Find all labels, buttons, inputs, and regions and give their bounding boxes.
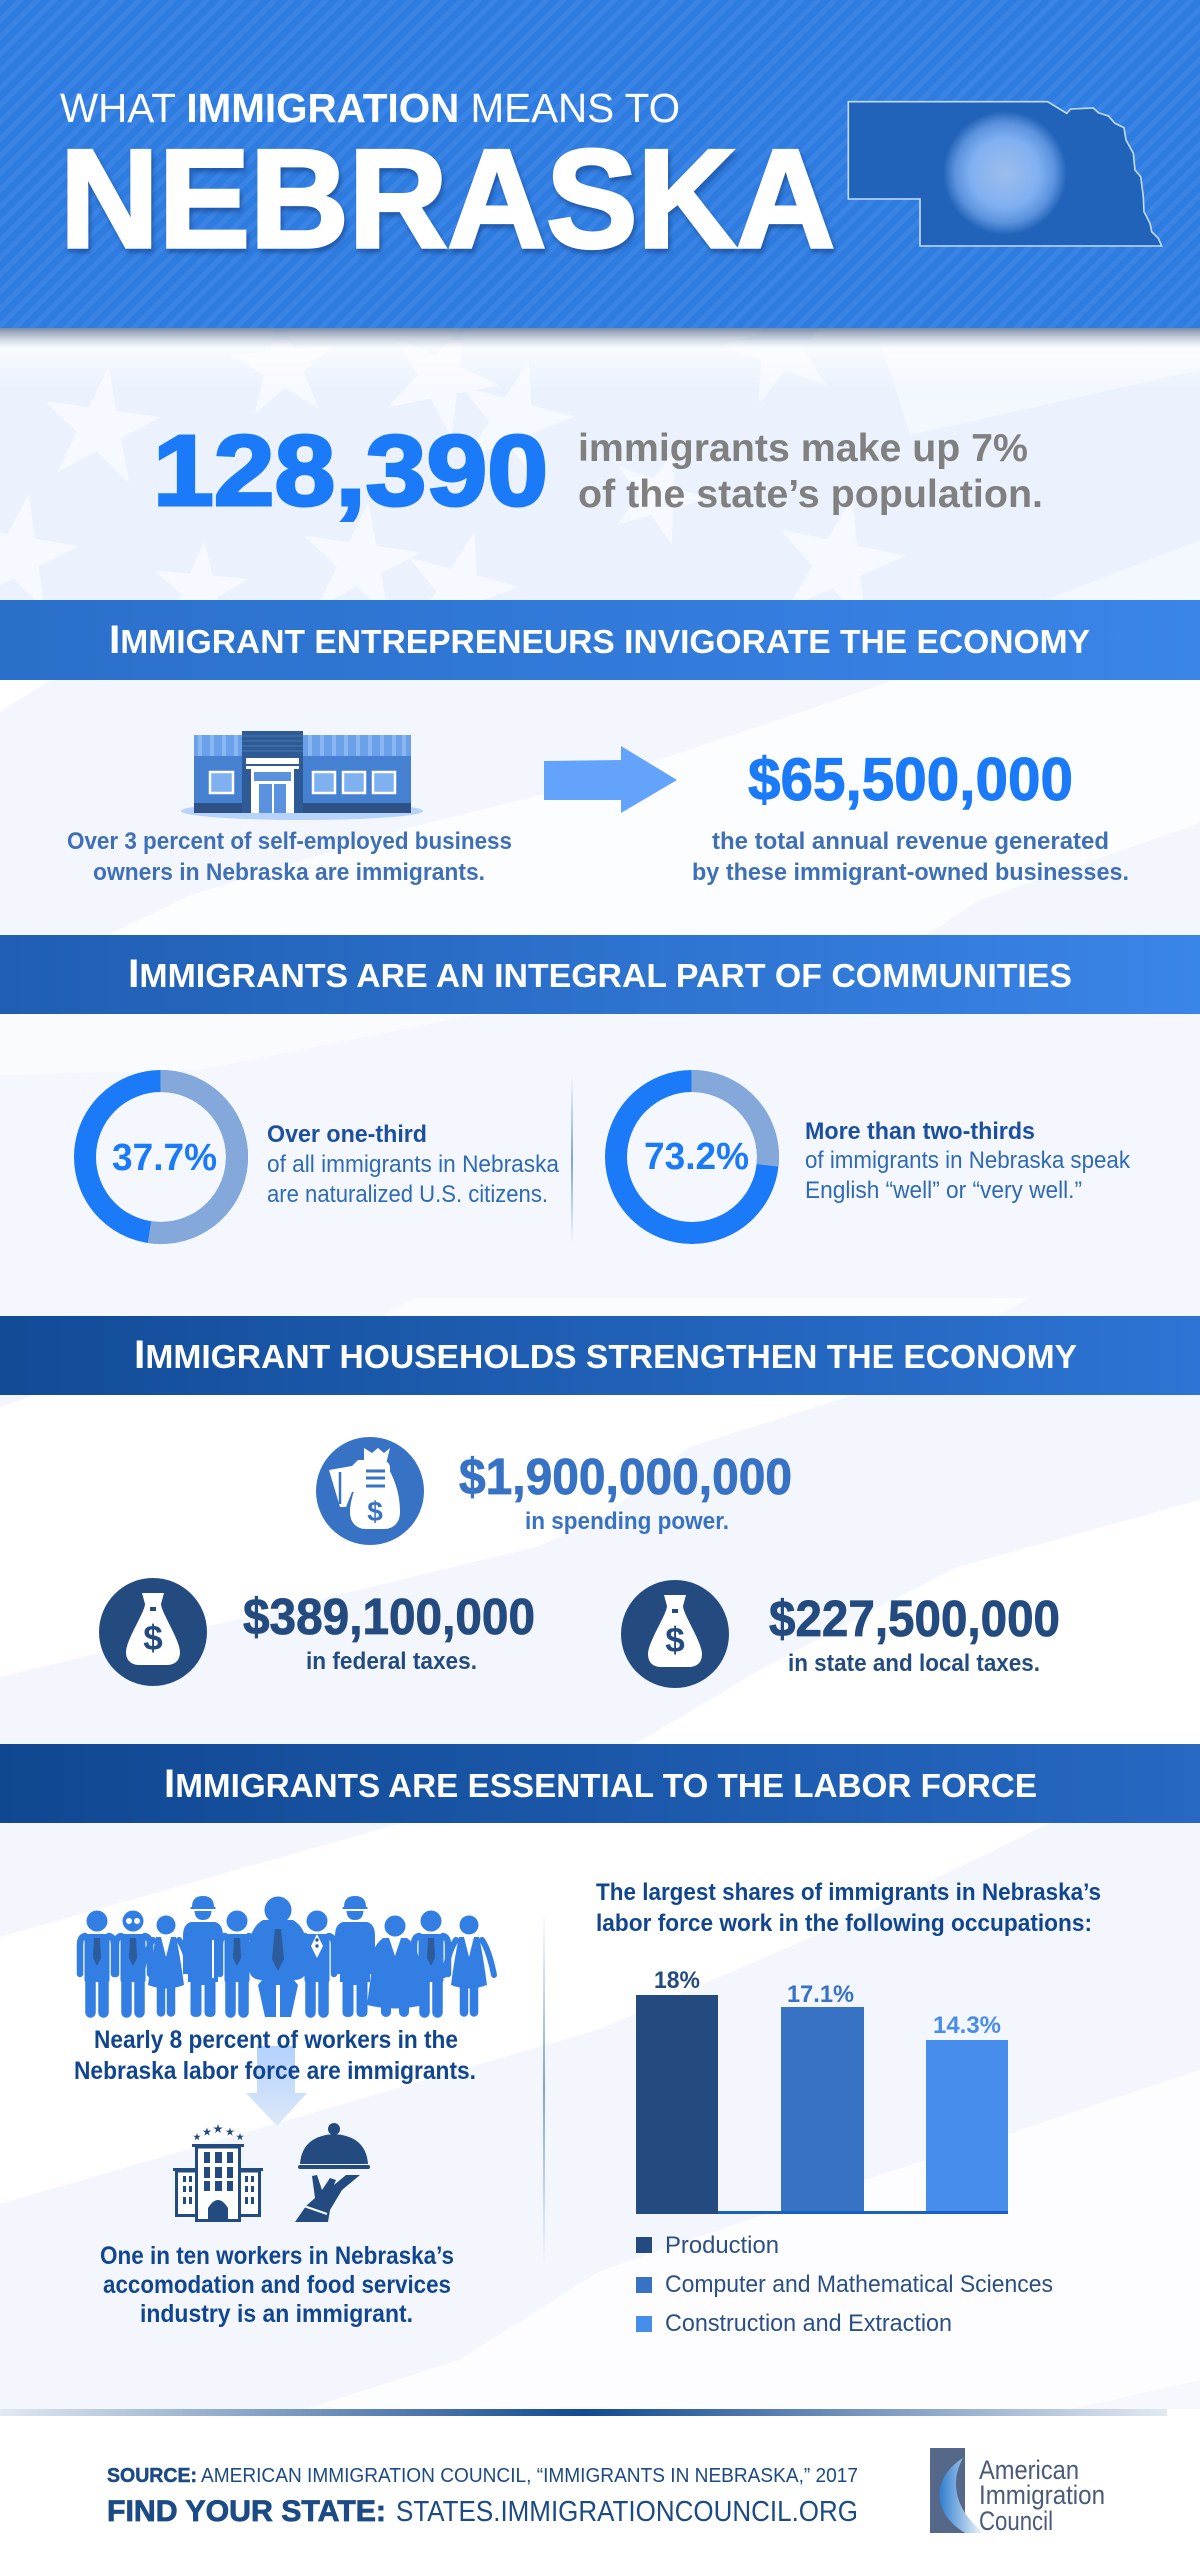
- text: English proficiency: [805, 1118, 1131, 1204]
- donut chart: 73.2% speak English: [616, 1081, 768, 1233]
- chart legend: Production: [665, 2232, 779, 2259]
- stat: annual revenue: [692, 746, 1129, 886]
- arrow: down: [246, 2046, 307, 2126]
- text: naturalized citizens: Over one-third: [267, 1121, 427, 1148]
- arrow: right: [544, 746, 677, 813]
- text: share of workers: [74, 2026, 476, 2085]
- text: naturalized citizens: [267, 1121, 560, 1208]
- text: food services: accomodation and food services: [103, 2271, 451, 2299]
- section heading: communities: IMMIGRANTS ARE AN INTEGRAL PART OF COMMUNITIES: [128, 952, 1072, 996]
- stat: spending power: $1,900,000,000: [459, 1448, 792, 1505]
- stat: state and local taxes: [769, 1590, 1060, 1677]
- section heading: communities: [0, 935, 1200, 1014]
- stat: annual revenue: $65,500,000: [748, 746, 1073, 813]
- bar: computer and mathematical sciences 17.1%: 17.1%: [787, 1981, 854, 2008]
- icon: money bag federal: [99, 1578, 207, 1686]
- title: WHAT IMMIGRATION MEANS TO: [60, 85, 680, 131]
- text: naturalized citizens: of all immigrants in Nebraska: [267, 1151, 560, 1178]
- stat: state and local taxes: in state and local taxes.: [788, 1650, 1040, 1677]
- donut chart: 37.7% naturalized: [85, 1081, 237, 1233]
- stat: federal taxes: in federal taxes.: [306, 1648, 477, 1675]
- text: English proficiency: English “well” or “very well.”: [805, 1177, 1082, 1204]
- chart heading: [596, 1879, 1101, 1937]
- footer background: [0, 2409, 1200, 2566]
- source line: AMERICAN IMMIGRATION COUNCIL, “IMMIGRANTS IN NEBRASKA,” 2017: [201, 2465, 858, 2487]
- find your state line: FIND YOUR STATE:: [107, 2495, 386, 2528]
- text: English proficiency: More than two-thirds: [805, 1118, 1035, 1145]
- bar chart: [636, 1967, 1008, 2214]
- logo: American Immigration Council: Immigration: [979, 2480, 1105, 2510]
- stat: annual revenue: by these immigrant-owned businesses.: [692, 859, 1129, 886]
- text: self-employed owners: Over 3 percent of self-employed business: [67, 828, 512, 855]
- logo: American Immigration Council: [930, 2448, 1105, 2536]
- stat: federal taxes: [243, 1588, 535, 1675]
- text: naturalized citizens: are naturalized U.S. citizens.: [267, 1181, 548, 1208]
- icon: money bag state and local: [621, 1580, 729, 1688]
- logo: American Immigration Council: American: [979, 2455, 1079, 2485]
- chart legend: Computer and Mathematical Sciences: [665, 2271, 1053, 2298]
- icon: storefront: [181, 731, 423, 820]
- stat: immigrant population: immigrants make up 7%: [578, 427, 1028, 470]
- section heading: labor force: IMMIGRANTS ARE ESSENTIAL TO THE LABOR FORCE: [164, 1762, 1037, 1806]
- find your state line: STATES.IMMIGRATIONCOUNCIL.ORG: [396, 2496, 858, 2528]
- section heading: households: [0, 1316, 1200, 1395]
- donut chart: 37.7% naturalized: 37.7%: [112, 1137, 217, 1179]
- header banner: [0, 0, 1200, 348]
- stat: state and local taxes: $227,500,000: [769, 1590, 1060, 1647]
- text: food services: One in ten workers in Nebraska’s: [100, 2242, 454, 2270]
- section heading: entrepreneurs: IMMIGRANT ENTREPRENEURS INVIGORATE THE ECONOMY: [109, 618, 1090, 662]
- icon: hand with money bag: $: [367, 1496, 383, 1527]
- icon: serving cloche: [295, 2123, 370, 2222]
- chart heading: labor force work in the following occupations:: [596, 1910, 1092, 1937]
- bar: production 18%: [636, 1967, 718, 2214]
- section heading: labor force: [0, 1744, 1200, 1823]
- stat: federal taxes: $389,100,000: [243, 1588, 535, 1645]
- bar: production 18%: 18%: [654, 1967, 700, 1994]
- chart legend: Construction and Extraction: [665, 2310, 952, 2337]
- bar: computer and mathematical sciences 17.1%: [781, 1981, 864, 2211]
- icon: hand with money bag: [316, 1437, 424, 1545]
- find your state line: [107, 2495, 858, 2528]
- source line: SOURCE:: [107, 2465, 197, 2487]
- bar: construction and extraction 14.3%: [926, 2012, 1008, 2211]
- donut chart: 73.2% speak English: 73.2%: [644, 1136, 749, 1178]
- text: food services: [100, 2242, 454, 2328]
- stat: immigrant population: [153, 415, 1043, 527]
- icon: group of workers: [80, 1896, 494, 2017]
- stat: spending power: in spending power.: [525, 1508, 729, 1535]
- text: self-employed owners: [67, 828, 512, 886]
- text: share of workers: Nearly 8 percent of workers in the: [94, 2026, 458, 2054]
- text: share of workers: Nebraska labor force are immigrants.: [74, 2057, 476, 2085]
- text: English proficiency: of immigrants in Nebraska speak: [805, 1147, 1131, 1174]
- section heading: households: IMMIGRANT HOUSEHOLDS STRENGTHEN THE ECONOMY: [134, 1333, 1077, 1377]
- stat: annual revenue: the total annual revenue generated: [712, 828, 1109, 855]
- stat: immigrant population: of the state’s population.: [578, 473, 1043, 516]
- chart heading: The largest shares of immigrants in Nebraska’s: [596, 1879, 1101, 1906]
- figure: large man: [249, 1896, 307, 2017]
- section heading: entrepreneurs: [0, 600, 1200, 680]
- text: self-employed owners: owners in Nebraska are immigrants.: [93, 859, 485, 886]
- bar: construction and extraction 14.3%: 14.3%: [933, 2012, 1001, 2039]
- figure: large woman: [367, 1916, 423, 2012]
- stat: immigrant population: 128,390: [153, 415, 548, 527]
- icon: Nebraska state map: [848, 102, 1162, 246]
- icon: hotel: [173, 2124, 263, 2222]
- chart legend: [636, 2232, 1053, 2337]
- stat: spending power: [459, 1448, 792, 1535]
- text: food services: industry is an immigrant.: [140, 2300, 413, 2328]
- title: NEBRASKA: [60, 120, 835, 277]
- logo: American Immigration Council: Council: [979, 2506, 1053, 2536]
